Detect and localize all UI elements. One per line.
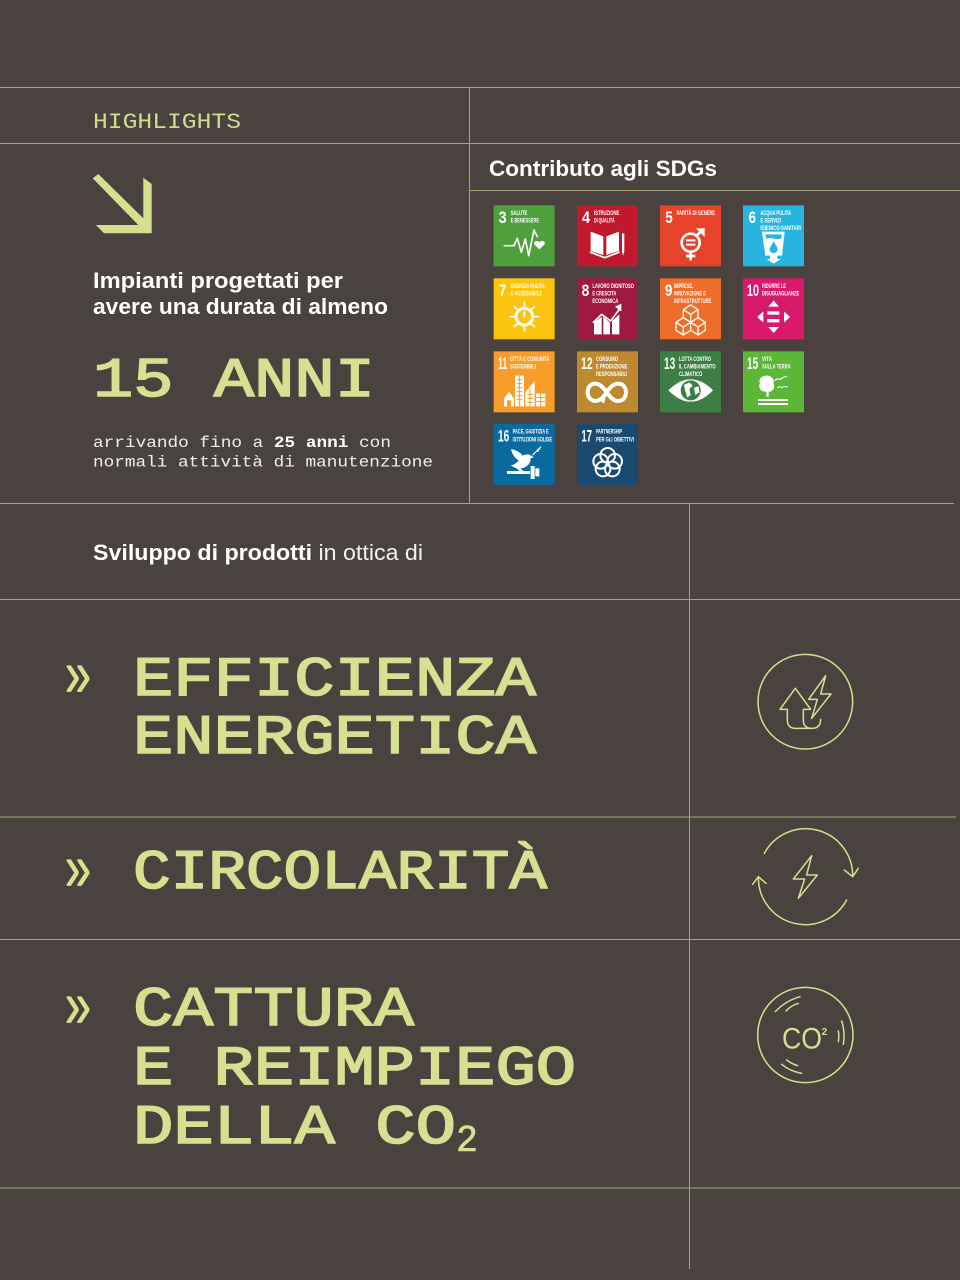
SDG tile 4: [577, 205, 638, 266]
text block: plant lifetime intro: Impianti progettati per: [93, 268, 343, 293]
SDG tile 6: ACQUA PULITA: [760, 210, 791, 217]
SDG tile 13: IL CAMBIAMENTO: [679, 364, 716, 371]
SDG tile 5: 5: [665, 208, 673, 227]
SDG tile 9: [660, 278, 721, 339]
SDG tile 13: [660, 351, 721, 412]
SDG tile 17: 17: [581, 427, 592, 446]
SDG tile 10: DISUGUAGLIANZE: [762, 291, 799, 298]
SDG tile 15: [743, 351, 804, 412]
SDG tile 6: 6: [749, 208, 756, 227]
icon: CO2 circle: [758, 987, 853, 1083]
SDG tile 4: ISTRUZIONE: [594, 210, 619, 217]
SDG tile 13: CLIMATICO: [679, 371, 702, 378]
icon: diagonal arrow: [93, 174, 152, 233]
heading: E REIMPIEGO: [133, 1037, 576, 1101]
SDG tile 8: E CRESCITA: [592, 291, 617, 298]
SDG tile 12: CONSUMO: [596, 356, 618, 363]
SDG tile 3: [494, 205, 555, 266]
SDG tile 7: [494, 278, 555, 339]
panel: SDG tiles row 1 and 2: [494, 205, 804, 339]
SDG tile 3: E BENESSERE: [511, 218, 539, 225]
SDG tile 9: 9: [665, 281, 672, 300]
SDG tile 7: E ACCESSIBILE: [511, 291, 542, 298]
SDG tile 17: [577, 424, 638, 485]
icon: energy efficiency: [758, 654, 853, 749]
SDG tile 8: ECONOMICA: [592, 298, 619, 305]
SDG tile 9: INFRASTRUTTURE: [674, 298, 711, 305]
heading: CATTURA: [133, 978, 414, 1042]
heading: SDG contribution: Contributo agli SDGs: [489, 156, 717, 181]
SDG tile 4: DI QUALITÀ: [594, 216, 615, 225]
SDG tile 16: ISTITUZIONI SOLIDE: [513, 436, 552, 443]
SDG tile 3: 3: [499, 208, 507, 227]
text block: maintenance note: normali attività di manutenzione: [93, 454, 433, 472]
SDG tile 12: 12: [581, 354, 593, 373]
SDG tile 16: [494, 424, 555, 485]
panel: SDG tiles row 3 and 4: [494, 351, 804, 485]
heading: EFFICIENZA: [133, 648, 536, 712]
heading: ENERGETICA: [133, 706, 536, 770]
SDG tile 15: SULLA TERRA: [762, 364, 791, 371]
SDG tile 9: IMPRESE,: [674, 283, 693, 290]
SDG tile 9: INNOVAZIONE E: [674, 291, 706, 298]
subscript 2: 2: [456, 1120, 478, 1163]
SDG tile 10: RIDURRE LE: [762, 283, 786, 290]
SDG tile 16: PACE, GIUSTIZIA E: [513, 429, 549, 436]
SDG tile 7: ENERGIA PULITA: [511, 283, 545, 290]
SDG tile 11: CITTÀ E COMUNITÀ: [510, 354, 550, 363]
SDG tile 13: LOTTA CONTRO: [679, 356, 711, 363]
icon: CO2 circle: 2: [822, 1027, 828, 1038]
text block: product development lead: Sviluppo di prodotti in ottica di: [93, 540, 423, 565]
SDG tile 12: RESPONSABILI: [596, 371, 627, 378]
SDG tile 11: SOSTENIBILI: [510, 364, 536, 371]
SDG tile 3: SALUTE: [511, 210, 527, 217]
text block: plant lifetime intro: [93, 268, 388, 319]
SDG tile 6: [743, 205, 804, 266]
SDG tile 17: PARTNERSHIP: [596, 429, 622, 436]
SDG tile 12: E PRODUZIONE: [596, 364, 627, 371]
SDG tile 8: LAVORO DIGNITOSO: [592, 283, 634, 290]
SDG tile 13: 13: [664, 354, 675, 373]
heading: CIRCOLARITÀ: [133, 841, 547, 905]
text block: plant lifetime intro: avere una durata di almeno: [93, 294, 388, 319]
text block: maintenance note: [93, 434, 433, 472]
icon: circular energy: [753, 829, 858, 925]
item: cattura e reimpiego: [65, 967, 576, 1163]
headline number: 15 anni: 15 ANNI: [93, 349, 375, 413]
heading: DELLA CO: [133, 1096, 456, 1160]
icon: CO2 circle: CO: [782, 1023, 822, 1056]
chevron: »: [65, 967, 91, 1041]
SDG tile 11: 11: [498, 354, 507, 373]
SDG tile 8: [577, 278, 638, 339]
heading: highlights: HIGHLIGHTS: [93, 110, 241, 135]
item: efficienza energetica: [65, 636, 536, 770]
SDG tile 15: VITA: [762, 356, 772, 363]
SDG tile 8: 8: [582, 281, 589, 300]
SDG tile 11: [494, 351, 555, 412]
SDG tile 7: 7: [499, 281, 506, 300]
SDG tile 6: E SERVIZI: [760, 218, 781, 225]
text block: maintenance note: arrivando fino a 25 anni con: [93, 434, 391, 452]
SDG tile 16: 16: [498, 427, 509, 446]
SDG tile 6: IGIENICO-SANITARI: [760, 225, 801, 232]
SDG tile 4: 4: [582, 208, 591, 227]
SDG tile 15: 15: [747, 354, 758, 373]
item: circolarita: [65, 830, 547, 905]
SDG tile 10: 10: [747, 281, 759, 300]
SDG tile 5: [660, 205, 721, 266]
chevron: »: [65, 830, 91, 904]
SDG tile 5: PARITÀ DI GENERE: [677, 208, 715, 217]
SDG tile 17: PER GLI OBIETTIVI: [596, 436, 634, 443]
SDG tile 10: [743, 278, 804, 339]
SDG tile 12: [577, 351, 638, 412]
chevron: »: [65, 636, 91, 710]
